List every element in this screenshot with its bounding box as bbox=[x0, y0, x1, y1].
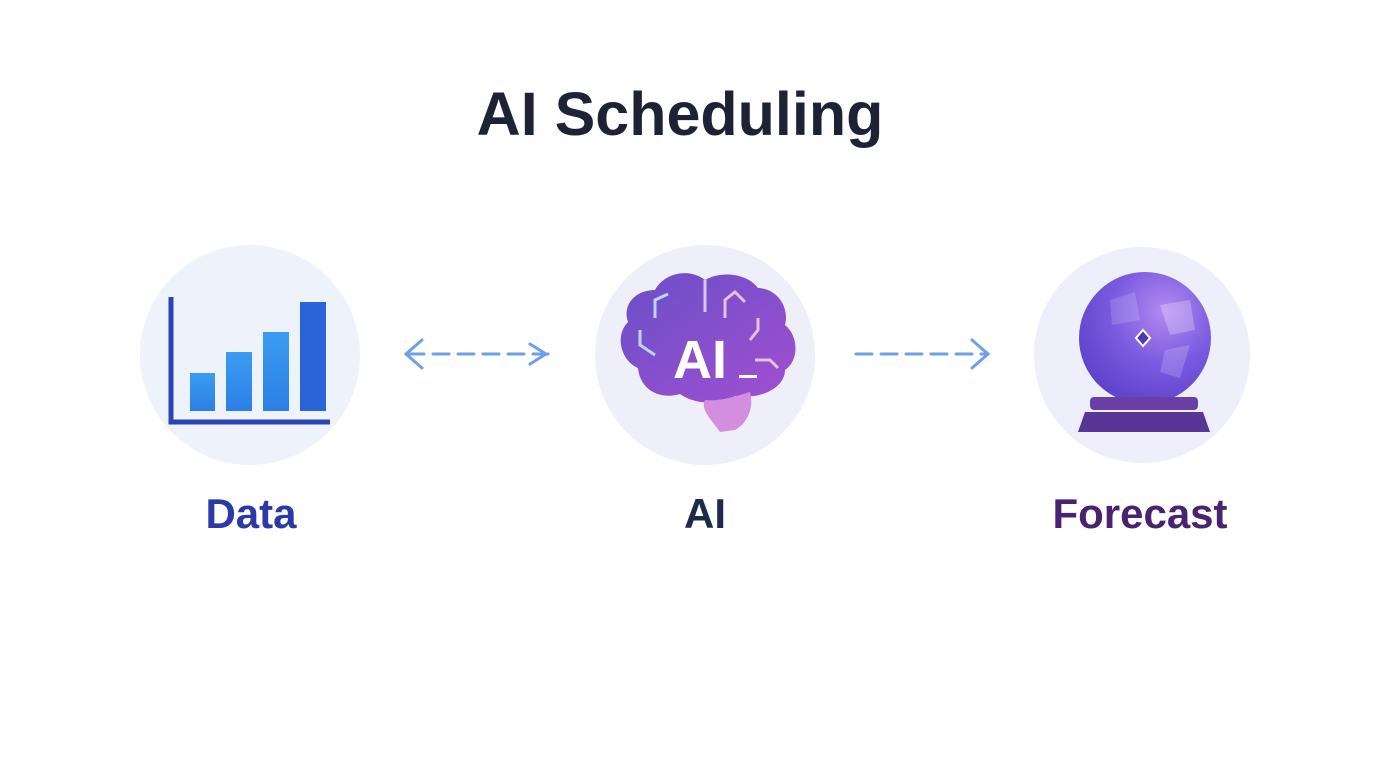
title: AI Scheduling bbox=[477, 80, 883, 148]
label: forecast: Forecast bbox=[1052, 490, 1228, 537]
arrow: bidirectional left bbox=[406, 340, 548, 368]
label: data: Data bbox=[205, 490, 297, 537]
arrow: right bbox=[856, 340, 988, 368]
icon: crystal ball bbox=[1078, 272, 1211, 432]
label: AI: AI bbox=[684, 490, 726, 537]
icon: brain: AI bbox=[673, 330, 727, 390]
icon: bar chart bbox=[171, 297, 330, 422]
panel: forecast bbox=[1034, 247, 1250, 537]
panel: data bbox=[140, 245, 360, 537]
panel: AI bbox=[595, 245, 815, 537]
icon: brain bbox=[621, 273, 796, 432]
